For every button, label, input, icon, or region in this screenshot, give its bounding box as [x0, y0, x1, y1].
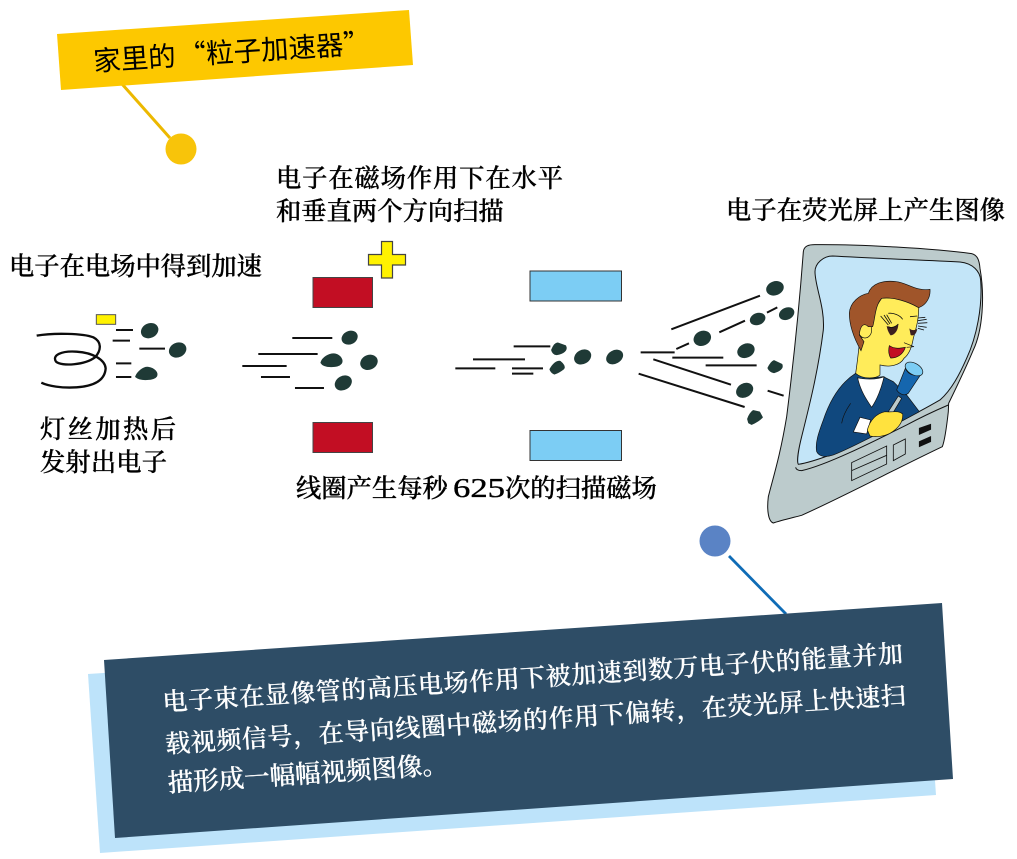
presenter cuff — [853, 417, 871, 434]
label: filament — [39, 416, 176, 477]
presenter hair — [849, 281, 930, 351]
callout pointer: blue dot and line — [700, 526, 786, 614]
electrons group 2 — [242, 328, 380, 394]
coil: blue bottom — [530, 430, 622, 460]
microphone — [897, 368, 923, 395]
label: magnetic scanning: 电子在磁场作用下在水平 — [276, 165, 563, 193]
presenter mouth — [889, 346, 905, 358]
callout: title tag with pointer: 家里的“粒子加速器” — [92, 21, 372, 79]
description text: 描形成一幅幅视频图像。 — [167, 750, 449, 798]
presenter shirt — [858, 377, 884, 407]
filament and electrons — [37, 315, 380, 394]
microphone handle — [888, 396, 902, 414]
icon: filament coil — [37, 334, 106, 388]
label: scan coil: 线圈产生每秒 — [296, 475, 449, 503]
presenter ear — [858, 322, 872, 338]
coil: red bottom — [313, 422, 372, 452]
description text — [162, 640, 909, 798]
presenter eyes — [881, 313, 927, 347]
icon: television with presenter — [768, 245, 983, 523]
screen — [798, 256, 981, 464]
jacket crease — [842, 403, 851, 423]
icon: minus charge — [96, 315, 116, 324]
electrons group 1 — [113, 320, 189, 379]
label: magnetic scanning — [276, 165, 563, 226]
label: magnetic scanning: 和垂直两个方向扫描 — [276, 198, 504, 226]
description text: 电子束在显像管的高压电场作用下被加速到数万电子伏的能量并加 — [162, 640, 904, 717]
label: filament: 发射出电子 — [40, 449, 167, 477]
description text: 载视频信号，在导向线圈中磁场的作用下偏转，在荧光屏上快速扫 — [164, 682, 907, 759]
label: field acceleration: 电子在电场中得到加速 — [9, 253, 263, 281]
label: scan coil: 次的扫描磁场 — [505, 475, 657, 503]
tv body — [768, 245, 983, 523]
callout: title tag with pointer — [57, 10, 413, 164]
presenter neck and face — [856, 297, 919, 378]
screen lower rim — [796, 405, 948, 471]
tv panel slots — [852, 424, 931, 481]
coil: blue top — [530, 271, 622, 301]
presenter jacket — [816, 373, 919, 456]
coil: red top — [313, 278, 372, 308]
icon: plus charge — [368, 242, 406, 278]
label: scan coil — [296, 473, 657, 503]
electron beam to screen — [455, 279, 796, 424]
label: filament: 灯丝加热后 — [39, 416, 176, 444]
label: image on screen: 电子在荧光屏上产生图像 — [726, 197, 1005, 225]
presenter hand — [867, 412, 903, 437]
panel: description box — [88, 603, 953, 853]
label: scan coil: 625 — [453, 473, 505, 503]
